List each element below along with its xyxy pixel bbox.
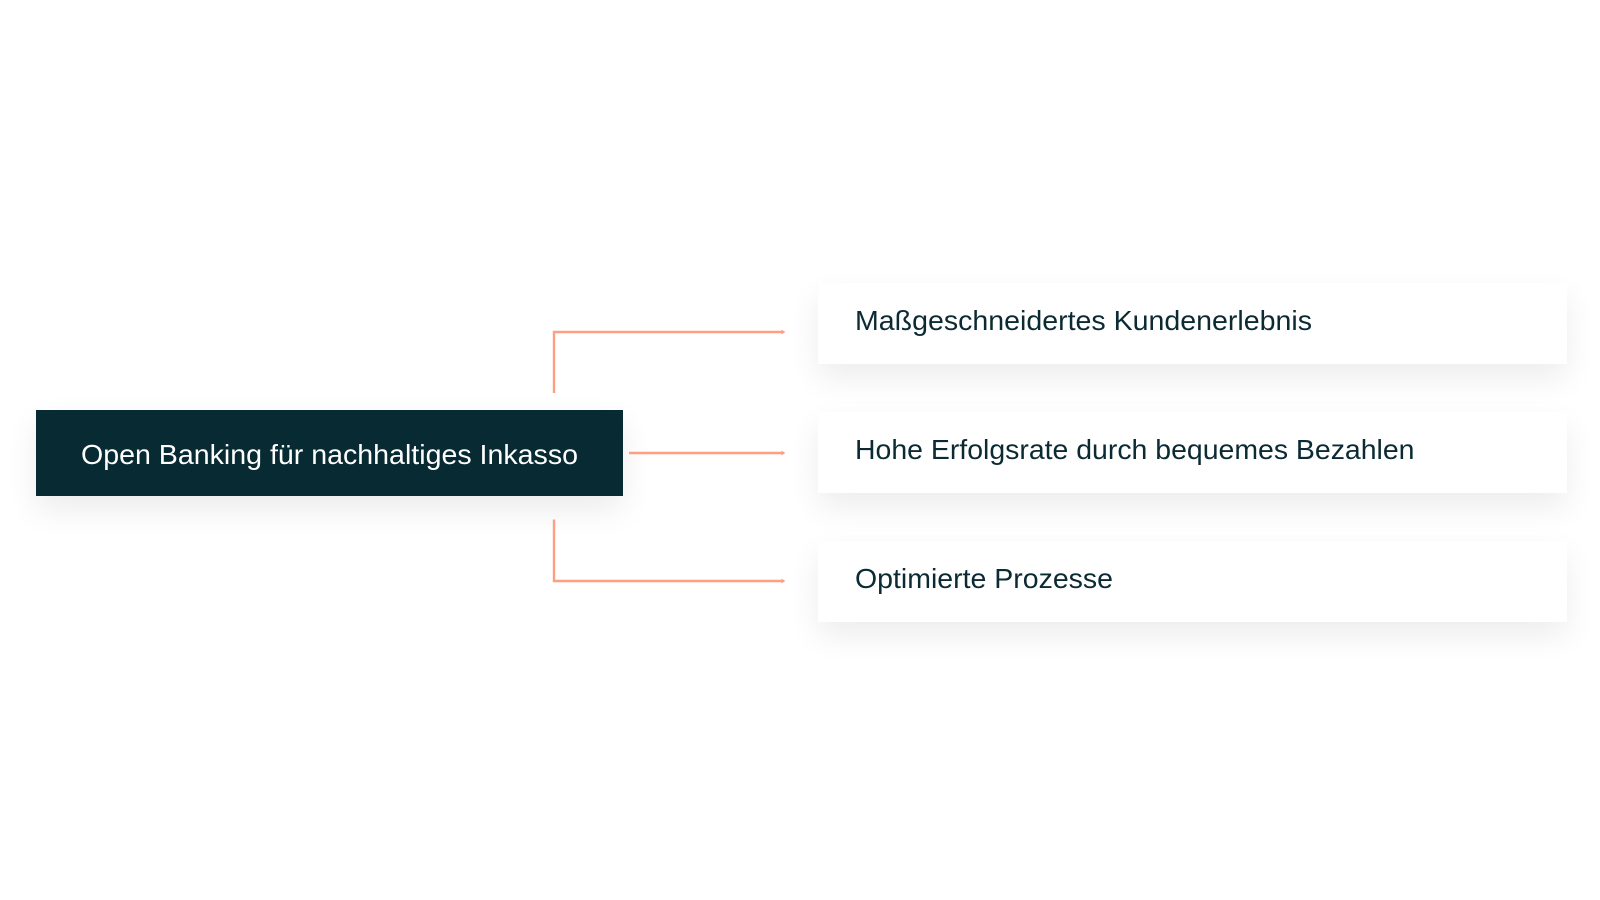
card: Maßgeschneidertes Kundenerlebnis [818,283,1567,364]
label: Maßgeschneidertes Kundenerlebnis: Maßgeschneidertes Kundenerlebnis [855,305,1312,336]
arrow: bottom connector [554,520,784,582]
arrow: top connector [554,330,784,393]
arrow: middle connector [629,452,784,454]
card: Optimierte Prozesse [818,541,1567,622]
label: Optimierte Prozesse: Optimierte Prozesse [855,563,1113,594]
main box: Open Banking für nachhaltiges Inkasso [36,410,623,496]
label: Hohe Erfolgsrate durch bequemes Bezahlen: Hohe Erfolgsrate durch bequemes Bezahlen [855,434,1414,465]
main label: Open Banking für nachhaltiges Inkasso [81,439,578,470]
card: Hohe Erfolgsrate durch bequemes Bezahlen [818,412,1567,493]
